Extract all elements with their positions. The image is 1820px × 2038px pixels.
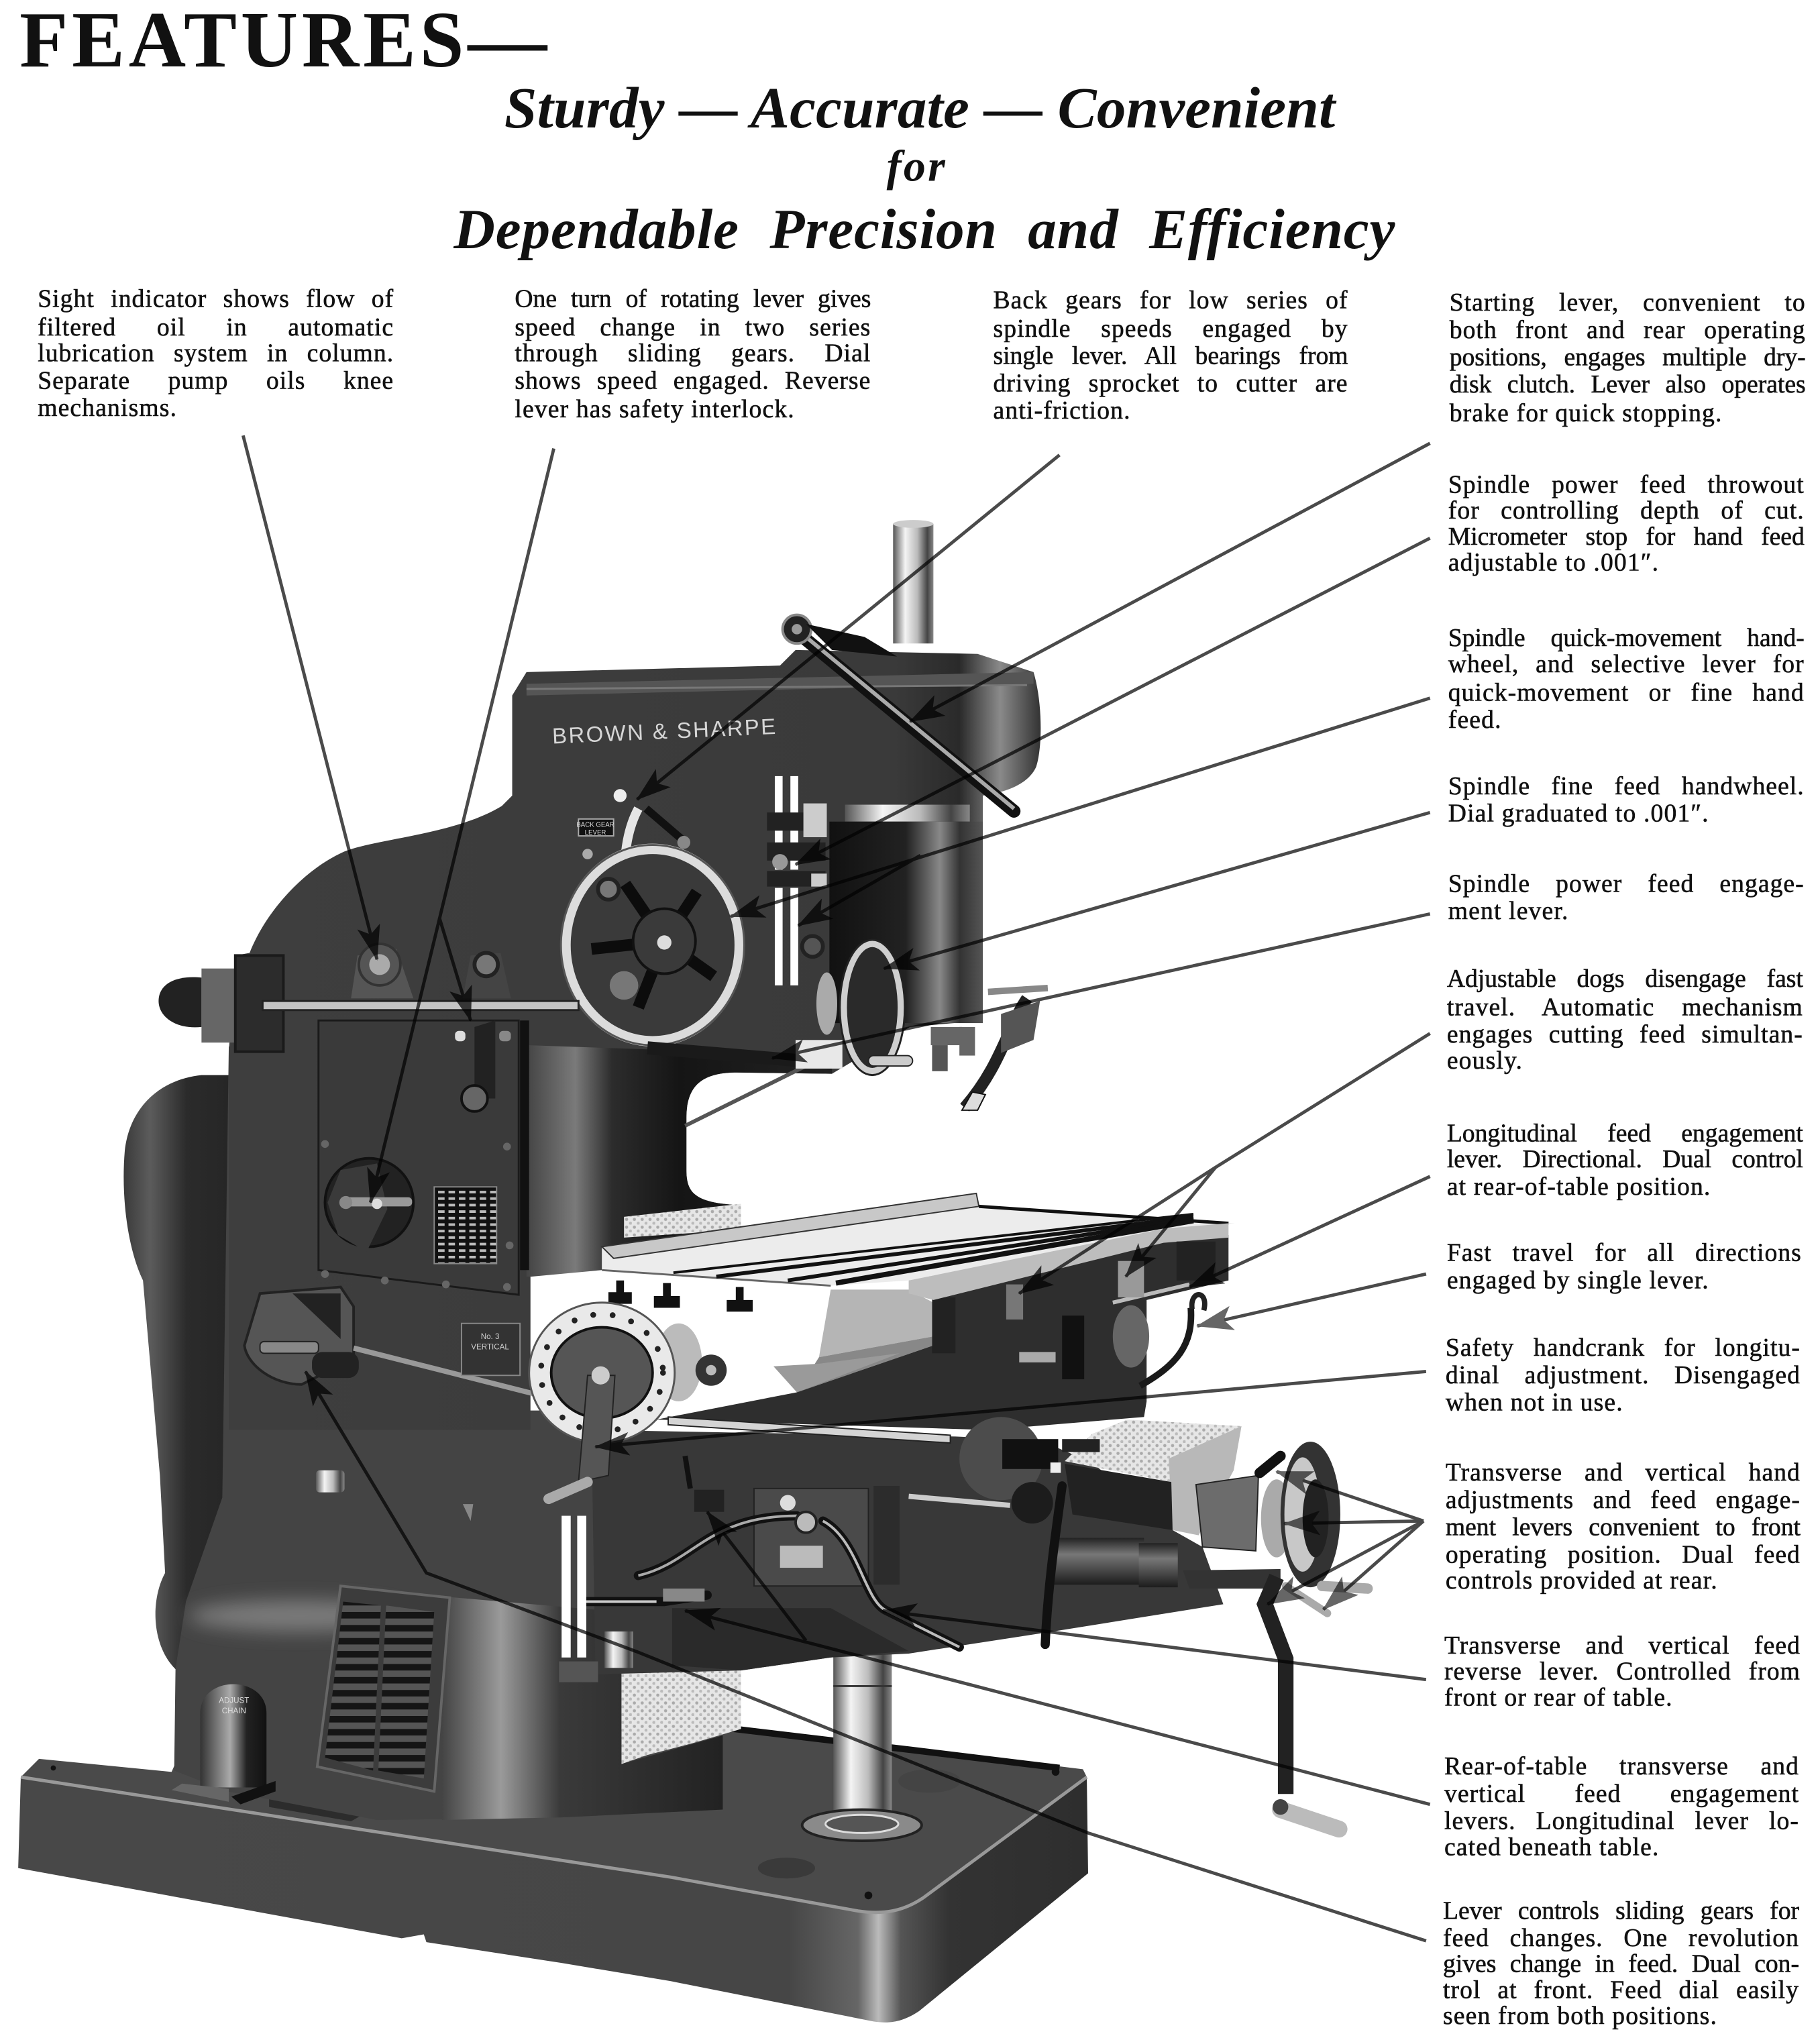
text: back gears	[994, 287, 1348, 425]
text: feed reverse lever: Transverse and vertical feed	[1444, 1633, 1801, 1660]
text: adjustable dogs	[1446, 966, 1803, 1075]
knee	[592, 1417, 1242, 1674]
arrow: transverse adjustment three	[1267, 1521, 1424, 1604]
text: feed change lever: gives change in feed. Dual con-	[1443, 1951, 1799, 1978]
text: sight indicator: mechanisms.	[38, 395, 177, 423]
text: transverse and vertical adjustments: operating position. Dual feed	[1446, 1542, 1801, 1569]
text: spindle fine feed: Dial graduated to .001″.	[1448, 801, 1709, 828]
arrow: feed change lever	[305, 1371, 1426, 1941]
text: feed change lever: feed changes. One revolution	[1443, 1925, 1799, 1953]
text: fast travel	[1447, 1240, 1802, 1295]
spindle shaft	[893, 520, 933, 643]
back gear lever: LEVER	[585, 829, 606, 837]
text: rear-of-table levers: vertical feed engagement	[1444, 1781, 1799, 1809]
text: transverse and vertical adjustments: Transverse and vertical hand	[1446, 1460, 1801, 1487]
text: feed change lever: Lever controls sliding gears for	[1443, 1898, 1799, 1925]
text: sight indicator: filtered oil in automatic	[38, 315, 394, 342]
text: spindle quick-movement: Spindle quick-movement hand-	[1448, 625, 1805, 653]
text: rear-of-table levers	[1444, 1754, 1799, 1862]
text: transverse and vertical adjustments: controls provided at rear.	[1446, 1568, 1718, 1595]
text: back gears: Back gears for low series of	[994, 287, 1348, 315]
text: transverse and vertical adjustments: ment levers convenient to front	[1446, 1515, 1801, 1542]
text: rear-of-table levers: levers. Longitudinal lever lo-	[1444, 1809, 1799, 1835]
arrow: rear-of-table lever upper	[707, 1512, 806, 1641]
cross rod and rear knob	[158, 955, 578, 1052]
arrow: transverse adjustment four	[1324, 1521, 1424, 1609]
text: transverse and vertical adjustments	[1446, 1460, 1801, 1595]
column lower body	[123, 1047, 722, 1820]
text: starting lever: brake for quick stopping.	[1450, 400, 1723, 428]
subtitle: sturdy accurate convenient: Sturdy — Accurate — Convenient	[504, 75, 1337, 140]
text: rear-of-table levers: Rear-of-table transverse and	[1444, 1754, 1799, 1781]
text: longitudinal feed	[1447, 1120, 1803, 1201]
text: rotating lever: lever has safety interlock.	[515, 396, 795, 424]
quill housing	[829, 805, 983, 1023]
arrow: fast travel	[1197, 1274, 1426, 1326]
text: sight indicator	[38, 286, 394, 423]
speckled lower block	[621, 1670, 741, 1764]
back gear lever: BACK GEAR	[576, 821, 614, 828]
text: fast travel: engaged by single lever.	[1447, 1267, 1709, 1295]
text: spindle fine feed: Spindle fine feed handwheel.	[1448, 773, 1805, 801]
text: feed change lever: trol at front. Feed dial easily	[1443, 1977, 1799, 2004]
feed change lever box	[244, 1287, 533, 1393]
speed chart plate	[434, 1187, 496, 1264]
head logo: BROWN & SHARPE	[551, 714, 776, 748]
arrow: feed reverse lever	[883, 1611, 1426, 1680]
arrow: longitudinal lever	[1189, 1177, 1430, 1287]
text: feed change lever: seen from both positions.	[1443, 2003, 1717, 2031]
spindle slides	[767, 776, 826, 985]
text: spindle quick-movement	[1448, 625, 1805, 735]
arrow: sight indicator	[243, 435, 377, 959]
subtitle: for: for	[887, 142, 946, 191]
arrow: back gears	[637, 455, 1059, 800]
text: starting lever: positions, engages multiple dry-	[1450, 345, 1806, 372]
text: rotating lever: through sliding gears. Dial	[515, 341, 871, 368]
text: safety handcrank: dinal adjustment. Disengaged	[1446, 1362, 1801, 1390]
text: spindle power feed throwout	[1448, 472, 1805, 577]
gear plate	[319, 1020, 519, 1295]
text: sight indicator: Sight indicator shows flow of	[38, 286, 394, 313]
text: longitudinal feed: lever. Directional. Dual control	[1447, 1146, 1803, 1174]
table	[602, 1193, 1235, 1300]
text: rotating lever: speed change in two series	[515, 315, 871, 342]
text: spindle power feed throwout: for controlling depth of cut.	[1448, 498, 1805, 525]
starting lever	[783, 615, 1014, 811]
text: starting lever: both front and rear operating	[1450, 317, 1806, 345]
chain adjust cap: ADJUST	[219, 1697, 249, 1705]
text: spindle power feed engagement: ment lever.	[1448, 898, 1569, 926]
arrow: power feed engagement	[772, 914, 1430, 1058]
text: back gears: spindle speeds engaged by	[994, 316, 1348, 343]
vent	[317, 1586, 449, 1791]
leader arrows	[243, 435, 1430, 1941]
arrow: adjustable dogs left	[1019, 1034, 1430, 1293]
speed dial	[325, 1159, 413, 1252]
sight indicator boss	[351, 944, 413, 998]
number plate: VERTICAL	[471, 1342, 509, 1351]
small cup and plug on column	[316, 1470, 473, 1521]
text: back gears: driving sprocket to cutter are	[994, 370, 1348, 398]
arrow: power feed throwout	[796, 538, 1430, 865]
arrow: starting lever	[910, 443, 1430, 722]
text: spindle power feed engagement: Spindle power feed engage-	[1448, 871, 1805, 898]
arrow: reverse lever branch	[439, 918, 471, 1020]
arrow: rotating lever dial	[370, 449, 554, 1203]
text: back gears: single lever. All bearings from	[994, 343, 1348, 370]
column upper body and ram	[229, 650, 1040, 1430]
text: back gears: anti-friction.	[994, 398, 1131, 425]
text: starting lever: disk clutch. Lever also operates	[1450, 372, 1806, 399]
reverse lever	[455, 953, 511, 1112]
text: starting lever: Starting lever, convenient to	[1450, 290, 1806, 317]
back gear lever	[576, 789, 690, 884]
text: spindle power feed throwout: adjustable to .001″.	[1448, 550, 1659, 577]
chain adjust cap: CHAIN	[222, 1707, 246, 1715]
arrow: adjustable dogs right	[1126, 1167, 1216, 1277]
text: spindle quick-movement: quick-movement or fine hand	[1448, 680, 1805, 707]
text: adjustable dogs: engages cutting feed simultan-	[1447, 1022, 1803, 1049]
text: spindle power feed throwout: Micrometer stop for hand feed	[1448, 524, 1805, 551]
chain adjust cap	[172, 1684, 276, 1805]
text: longitudinal feed: at rear-of-table position.	[1447, 1174, 1711, 1201]
support pillar	[802, 1654, 922, 1841]
lower spindle clamps	[647, 988, 1048, 1126]
arrow: fine feed handwheel	[884, 812, 1430, 969]
text: feed reverse lever: front or rear of table.	[1444, 1684, 1673, 1712]
text: adjustable dogs: Adjustable dogs disengage fast	[1447, 966, 1803, 994]
text: longitudinal feed: Longitudinal feed engagement	[1447, 1120, 1803, 1148]
text: spindle quick-movement: feed.	[1448, 707, 1502, 735]
text: spindle quick-movement: wheel, and selective lever for	[1448, 651, 1805, 679]
text: feed reverse lever: reverse lever. Controlled from	[1444, 1659, 1801, 1686]
text: safety handcrank	[1445, 1335, 1801, 1417]
text: spindle power feed throwout: Spindle power feed throwout	[1448, 472, 1805, 499]
text: spindle fine feed	[1448, 773, 1805, 828]
text: transverse and vertical adjustments: adjustments and feed engage-	[1446, 1487, 1801, 1515]
dial and hand crank	[529, 1303, 727, 1682]
base plate	[18, 1725, 1088, 2023]
text: safety handcrank: when not in use.	[1446, 1390, 1623, 1417]
text: adjustable dogs: travel. Automatic mechanism	[1447, 994, 1803, 1022]
text: sight indicator: Separate pump oils knee	[38, 368, 394, 395]
arrow: rear-of-table lever lower	[685, 1611, 1430, 1805]
number plate: No. 3	[481, 1332, 499, 1341]
text: spindle power feed engagement	[1448, 871, 1805, 926]
main handwheel	[561, 845, 744, 1045]
text: rear-of-table levers: cated beneath table.	[1444, 1834, 1660, 1862]
fine feed handwheel	[802, 936, 912, 1075]
number plate	[462, 1324, 520, 1375]
text: feed change lever	[1443, 1898, 1799, 2031]
arrow: transverse adjustment one	[1277, 1472, 1424, 1521]
text: rotating lever	[515, 286, 871, 424]
arrow: quick movement handwheel	[731, 698, 1430, 916]
knee levers	[584, 1486, 1062, 1647]
text: adjustable dogs: eously.	[1447, 1048, 1523, 1075]
saddle	[657, 1235, 1228, 1430]
white cut-away window	[532, 1203, 955, 1417]
text: fast travel: Fast travel for all directions	[1447, 1240, 1802, 1267]
text: starting lever	[1449, 290, 1806, 428]
text: rotating lever: shows speed engaged. Reverse	[515, 368, 871, 395]
text: rotating lever: One turn of rotating lever gives	[515, 286, 871, 313]
arrow: transverse adjustment two	[1285, 1521, 1424, 1523]
text: safety handcrank: Safety handcrank for longitu-	[1446, 1335, 1801, 1362]
subtitle: dependable precision and efficiency: Dependable Precision and Efficiency	[453, 198, 1395, 261]
arrow: selective lever	[798, 855, 920, 926]
text: sight indicator: lubrication system in column.	[38, 341, 394, 368]
text: feed reverse lever	[1444, 1633, 1801, 1712]
arrow: safety handcrank	[596, 1371, 1426, 1447]
right handwheel and crank	[1183, 1442, 1368, 1829]
